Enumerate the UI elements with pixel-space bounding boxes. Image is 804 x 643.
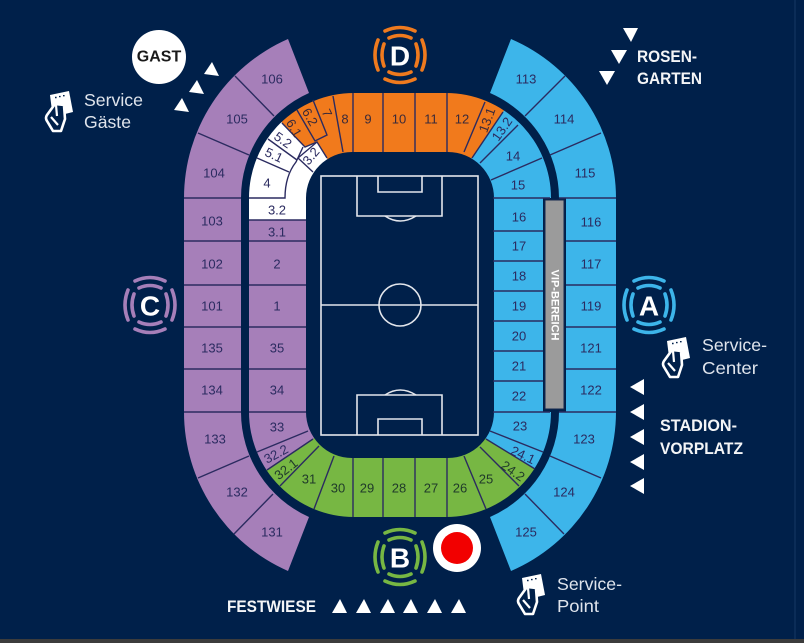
badge: A [624,278,674,332]
panel: block C purple stands: 106 [261,72,283,86]
panel: block A blue stands: 19 [512,298,526,314]
guest marker: GAST [137,48,181,66]
panel: block D orange stands: 13.1 [476,106,498,134]
panel: block A blue stands: 13.2 [489,114,515,144]
icon: service guests [46,91,73,131]
panel: white guest stands: 3.2 [268,202,286,218]
panel: block A blue stands: 119 [581,298,601,314]
panel: block A blue stands: 16 [512,210,526,224]
panel: block C purple stands: 104 [203,166,225,180]
panel: block C purple stands: 1 [273,298,281,314]
panel: block C purple stands [184,39,314,571]
panel: block A blue stands: 115 [575,166,595,180]
marker: red dot [433,524,481,572]
panel: block C purple stands: 133 [204,432,226,446]
panel: block A blue stands: 20 [512,328,526,344]
heading: Rosengarten [637,48,702,88]
panel: block D orange stands: 10 [392,112,406,126]
panel: block A blue stands: 114 [554,112,574,126]
panel: block D orange stands: 8 [341,112,349,126]
text: service guests: Gäste [84,112,131,132]
heading: Stadionvorplatz: VORPLATZ [660,440,743,458]
panel: block C purple stands: 34 [270,382,284,398]
football pitch [321,176,478,435]
heading: Stadionvorplatz [660,417,743,458]
text: service point: Point [557,596,599,616]
panel: block A blue stands: 17 [512,238,526,254]
panel: white guest stands: 4 [263,176,271,190]
panel: block A blue stands: 22 [512,388,526,404]
text: service center [702,335,767,378]
arrows: Rosengarten [599,28,638,85]
arrows: guest entrance [174,62,219,112]
panel: block A blue stands: 21 [512,358,526,374]
panel: block C purple stands: 32.2 [261,441,291,467]
panel: block A blue stands: 24.1 [508,443,538,467]
panel: block A blue stands: 123 [573,432,595,446]
heading: Festwiese: FESTWIESE [227,598,316,616]
panel: block D orange stands: 7 [319,107,335,119]
panel: block C purple stands: 131 [261,524,283,540]
panel: block D orange stands [282,93,504,159]
panel: white guest stands [249,122,328,221]
panel: block C purple stands: 134 [201,382,223,398]
panel: block C purple stands: 135 [201,340,223,356]
panel: block C purple stands: 2 [273,256,281,272]
panel: block A blue stands [465,39,616,571]
panel: block A blue stands: 18 [512,268,526,284]
text: service point: Service- [557,574,622,594]
panel: block A blue stands: 124 [553,484,575,500]
arrows: Stadionvorplatz [630,379,644,494]
panel: block A blue stands: 116 [581,214,601,230]
panel: block C purple stands: 103 [201,214,223,228]
text: service point [557,574,622,616]
panel: block B green stands: 31 [302,472,316,486]
badge: B [375,530,425,584]
heading: Stadionvorplatz: STADION- [660,417,737,435]
panel: block C purple stands: 105 [226,112,248,126]
badge: C [125,278,175,332]
panel: white guest stands: 3.2 [299,144,323,168]
panel: block D orange stands: 6.2 [299,105,321,129]
panel: block C purple stands: 3.1 [268,224,286,240]
panel: block C purple stands: 102 [201,256,223,272]
arrows: Festwiese [332,599,466,613]
panel: block B green stands: 32.1 [271,455,301,483]
panel: block B green stands: 30 [331,480,345,496]
panel: block C purple stands: 35 [270,340,284,356]
panel: block B green stands: 29 [360,480,374,496]
panel: block B green stands: 25 [479,472,493,486]
VIP area [545,200,564,409]
panel: block A blue stands: 113 [516,72,536,86]
text: service center: Center [702,358,758,378]
panel: block A blue stands: 15 [511,178,525,192]
panel: block A blue stands: 125 [515,524,537,540]
guest marker [132,30,186,84]
panel: block B green stands [266,438,536,517]
panel: block B green stands: 28 [392,480,406,496]
panel: block A blue stands: 23 [513,418,527,434]
panel: block A blue stands: 14 [506,148,520,164]
icon: service point [518,574,545,614]
panel: block B green stands: 27 [424,480,438,496]
panel: block D orange stands: 9 [364,112,372,126]
panel: block A blue stands: 117 [581,256,601,272]
panel: block B green stands: 24.2 [498,458,528,484]
text: service guests: Service [84,90,143,110]
badge: B: B [390,542,410,574]
badge: A: A [639,290,659,322]
panel: white guest stands: 5.1 [263,144,285,166]
heading: Rosengarten: ROSEN- [637,48,697,66]
panel: block C purple stands: 33 [270,420,284,434]
VIP area: VIP-BEREICH [548,270,560,341]
text: service guests [84,90,143,132]
badge: D: D [390,40,410,72]
icon: service center [663,337,690,377]
panel: block D orange stands: 6.1 [283,116,305,140]
panel: block B green stands: 26 [453,480,467,496]
heading: Rosengarten: GARTEN [637,70,702,88]
panel: block D orange stands: 12 [455,112,469,126]
panel: block A blue stands: 121 [580,340,602,356]
panel: block D orange stands: 11 [424,112,438,126]
panel: block C purple stands: 132 [226,484,248,500]
text: service center: Service- [702,335,767,355]
panel: white guest stands: 5.2 [271,129,295,151]
badge: C: C [140,290,160,322]
panel: block A blue stands: 122 [580,382,602,398]
panel: block C purple stands: 101 [201,298,223,314]
badge: D [375,28,425,82]
